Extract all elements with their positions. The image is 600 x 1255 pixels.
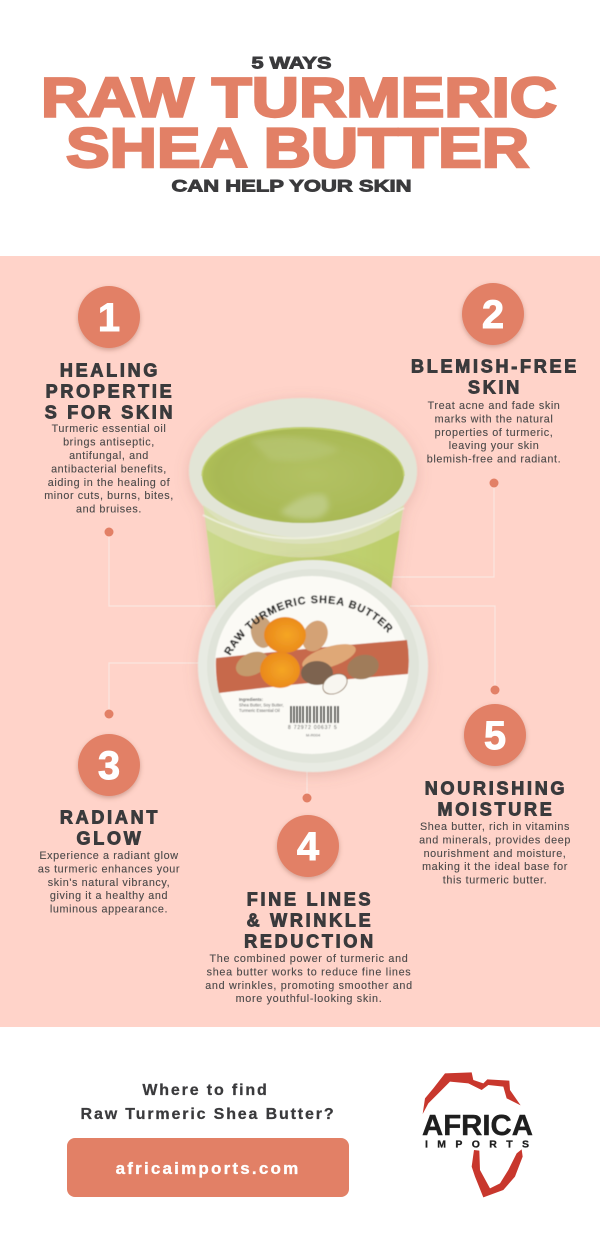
title line: Shea Butter: SHEA BUTTER	[66, 116, 529, 179]
number badge 4: 4	[297, 825, 320, 869]
number badge 1: 1	[98, 296, 120, 340]
benefit 5	[419, 704, 571, 886]
connector: benefit 5	[410, 606, 500, 694]
text 1	[44, 423, 174, 516]
heading 1	[45, 360, 175, 422]
footer call to action	[67, 1082, 349, 1197]
text 4	[205, 953, 413, 1005]
number badge 5: 5	[484, 714, 506, 758]
kicker: 5 ways: 5 WAYS	[252, 54, 332, 72]
text 3: as turmeric enhances your	[38, 864, 180, 876]
footer question	[81, 1082, 335, 1123]
text 2: properties of turmeric,	[435, 427, 553, 439]
text 4: The combined power of turmeric and	[210, 953, 408, 965]
heading 5: NOURISHING	[425, 778, 567, 798]
heading 3: GLOW	[76, 828, 144, 848]
text 4: and wrinkles, promoting smoother and	[205, 980, 413, 992]
barcode: 8 72972 00637 5	[288, 725, 338, 731]
connector: benefit 4	[302, 765, 312, 802]
text 4: more youthful-looking skin.	[236, 993, 382, 1005]
number badge 2: 2	[482, 293, 504, 337]
heading 4: FINE LINES	[247, 889, 373, 909]
text 3: luminous appearance.	[50, 904, 168, 916]
text 5: and minerals, provides deep	[419, 834, 571, 846]
subtitle: CAN HELP YOUR SKIN	[172, 176, 412, 196]
text 3: Experience a radiant glow	[39, 850, 179, 862]
number badge 5	[464, 704, 526, 766]
number badge 3: 3	[98, 744, 120, 788]
heading 5: MOISTURE	[437, 799, 555, 819]
text 1: aiding in the healing of	[48, 477, 171, 489]
ingredients text: Shea Butter, Soy Butter,	[239, 702, 284, 708]
website button	[67, 1138, 349, 1197]
text 2: marks with the natural	[435, 414, 553, 426]
panel: benefits	[0, 256, 600, 1027]
number badge 2	[462, 283, 524, 345]
connector: benefit 1	[104, 528, 220, 606]
heading 1: HEALING	[60, 360, 160, 380]
heading 5	[425, 778, 567, 819]
text 5: this turmeric butter.	[443, 874, 547, 886]
website button: africaimports.com	[116, 1159, 300, 1178]
heading 2: BLEMISH-FREE	[411, 356, 579, 376]
ingredients text: Turmeric Essential Oil	[239, 708, 280, 713]
benefit 2	[411, 283, 579, 466]
title block	[41, 54, 557, 196]
text 4: shea butter works to reduce fine lines	[207, 966, 411, 978]
curved label text: RAW TURMERIC SHEA BUTTER	[224, 594, 393, 656]
text 5	[419, 821, 571, 886]
text 2: Treat acne and fade skin	[428, 400, 560, 412]
text 2: leaving your skin	[449, 440, 539, 452]
benefit 1	[44, 286, 175, 516]
ingredients text	[239, 697, 284, 713]
text 1: antibacterial benefits,	[51, 464, 167, 476]
ingredients text: Ingredients:	[239, 697, 263, 702]
number badge 3	[78, 734, 140, 796]
number badge 4	[277, 815, 339, 877]
heading 2: SKIN	[468, 377, 522, 397]
footer question: Raw Turmeric Shea Butter?	[81, 1106, 335, 1123]
benefit 3	[38, 734, 180, 916]
text 1: and bruises.	[76, 504, 142, 516]
text 1: brings antiseptic,	[63, 436, 155, 448]
text 3: giving it a healthy and	[50, 890, 168, 902]
heading 1: S FOR SKIN	[45, 402, 175, 422]
number badge 1	[78, 286, 140, 348]
text 1: Turmeric essential oil	[52, 423, 166, 435]
title line: Raw Turmeric: RAW TURMERIC	[41, 66, 557, 128]
africa outline	[423, 1072, 523, 1197]
text 1: minor cuts, burns, bites,	[44, 490, 174, 502]
text 5: Shea butter, rich in vitamins	[420, 821, 570, 833]
text 2	[427, 400, 561, 466]
footer question: Where to find	[142, 1082, 269, 1099]
heading 1: PROPERTIE	[46, 381, 174, 401]
text 3	[38, 850, 180, 916]
barcode: M-R004	[306, 732, 321, 738]
connector: benefit 2	[390, 478, 498, 577]
barcode	[288, 706, 338, 738]
logo sub wordmark: IMPORTS	[425, 1138, 529, 1150]
logo wordmark: AFRICA	[422, 1110, 533, 1142]
benefit 4	[205, 815, 413, 1005]
heading 4: REDUCTION	[244, 931, 376, 951]
text 5: nourishment and moisture,	[424, 848, 566, 860]
heading 3: RADIANT	[60, 807, 160, 827]
product photo: jar lid with label	[194, 559, 432, 779]
connector: benefit 3	[104, 663, 205, 718]
logo: Africa Imports	[422, 1072, 533, 1197]
text 1: antifungal, and	[69, 450, 149, 462]
text 5: making it the ideal base for	[422, 861, 568, 873]
text 3: skin's natural vibrancy,	[48, 877, 170, 889]
heading 4	[244, 889, 376, 951]
heading 2	[411, 356, 579, 397]
product photo: open jar of turmeric shea butter	[189, 398, 417, 610]
heading 3	[60, 807, 160, 848]
turmeric roots and shea nuts	[232, 614, 382, 698]
text 2: blemish-free and radiant.	[427, 454, 561, 466]
heading 4: & WRINKLE	[247, 910, 373, 930]
